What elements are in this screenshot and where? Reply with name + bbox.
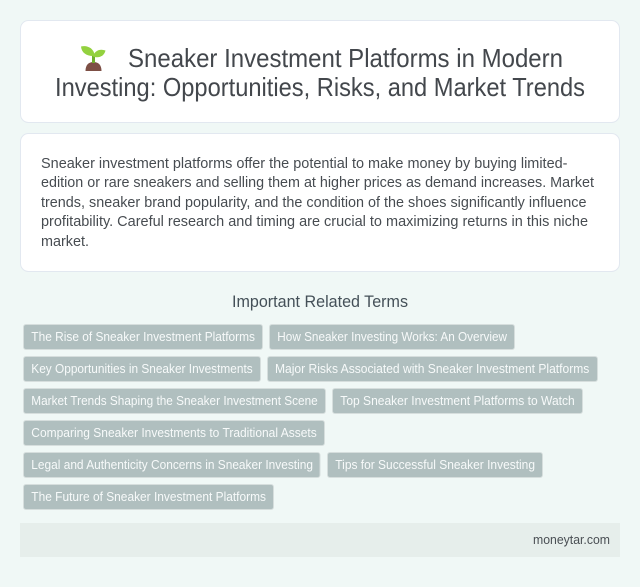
tag: key opportunities: Key Opportunities in Sneaker Investments	[31, 362, 253, 376]
tag: tips: Tips for Successful Sneaker Investing	[335, 458, 535, 472]
text block: description: market.	[41, 233, 89, 250]
tag: future: The Future of Sneaker Investment Platforms	[31, 490, 266, 504]
tag: rise of platforms	[24, 324, 262, 350]
tag: top platforms: Top Sneaker Investment Platforms to Watch	[340, 394, 575, 408]
tag: tips	[328, 452, 542, 478]
title: Sneaker Investment Platforms in Modern	[128, 43, 563, 73]
title	[55, 43, 585, 102]
tag: how it works	[270, 324, 514, 350]
tag: legal concerns	[24, 452, 320, 478]
panel: title card	[20, 20, 620, 122]
text block: description	[41, 155, 595, 250]
tag: future	[24, 484, 274, 510]
footer: moneytar.com	[533, 533, 610, 547]
panel: description card	[20, 134, 620, 272]
tag: key opportunities	[24, 356, 260, 382]
text block: description: Sneaker investment platforms offer the potential to make money by buying limited-	[41, 155, 568, 172]
tag: top platforms	[332, 388, 582, 414]
tag: comparing assets: Comparing Sneaker Investments to Traditional Assets	[31, 426, 317, 440]
tag: how it works: How Sneaker Investing Works: An Overview	[277, 330, 508, 344]
tag: major risks: Major Risks Associated with Sneaker Investment Platforms	[275, 362, 589, 376]
title: Investing: Opportunities, Risks, and Market Trends	[55, 72, 585, 102]
tag: comparing assets	[24, 420, 324, 446]
tag: market trends: Market Trends Shaping the Sneaker Investment Scene	[31, 394, 318, 408]
text block: description: profitability. Careful research and timing are crucial to maximizing returns in this niche	[41, 213, 588, 230]
tag: market trends	[24, 388, 326, 414]
text block: description: trends, sneaker brand popularity, and the condition of the shoes significantly influence	[41, 194, 586, 211]
heading: related terms: Important Related Terms	[232, 293, 408, 311]
icon: sprout	[81, 46, 106, 71]
tag: major risks	[268, 356, 598, 382]
footer	[20, 523, 620, 557]
tag: legal concerns: Legal and Authenticity Concerns in Sneaker Investing	[31, 458, 313, 472]
tag: rise of platforms: The Rise of Sneaker Investment Platforms	[31, 330, 255, 344]
text block: description: edition or rare sneakers and selling them at higher prices as demand increases. Market	[41, 174, 595, 191]
